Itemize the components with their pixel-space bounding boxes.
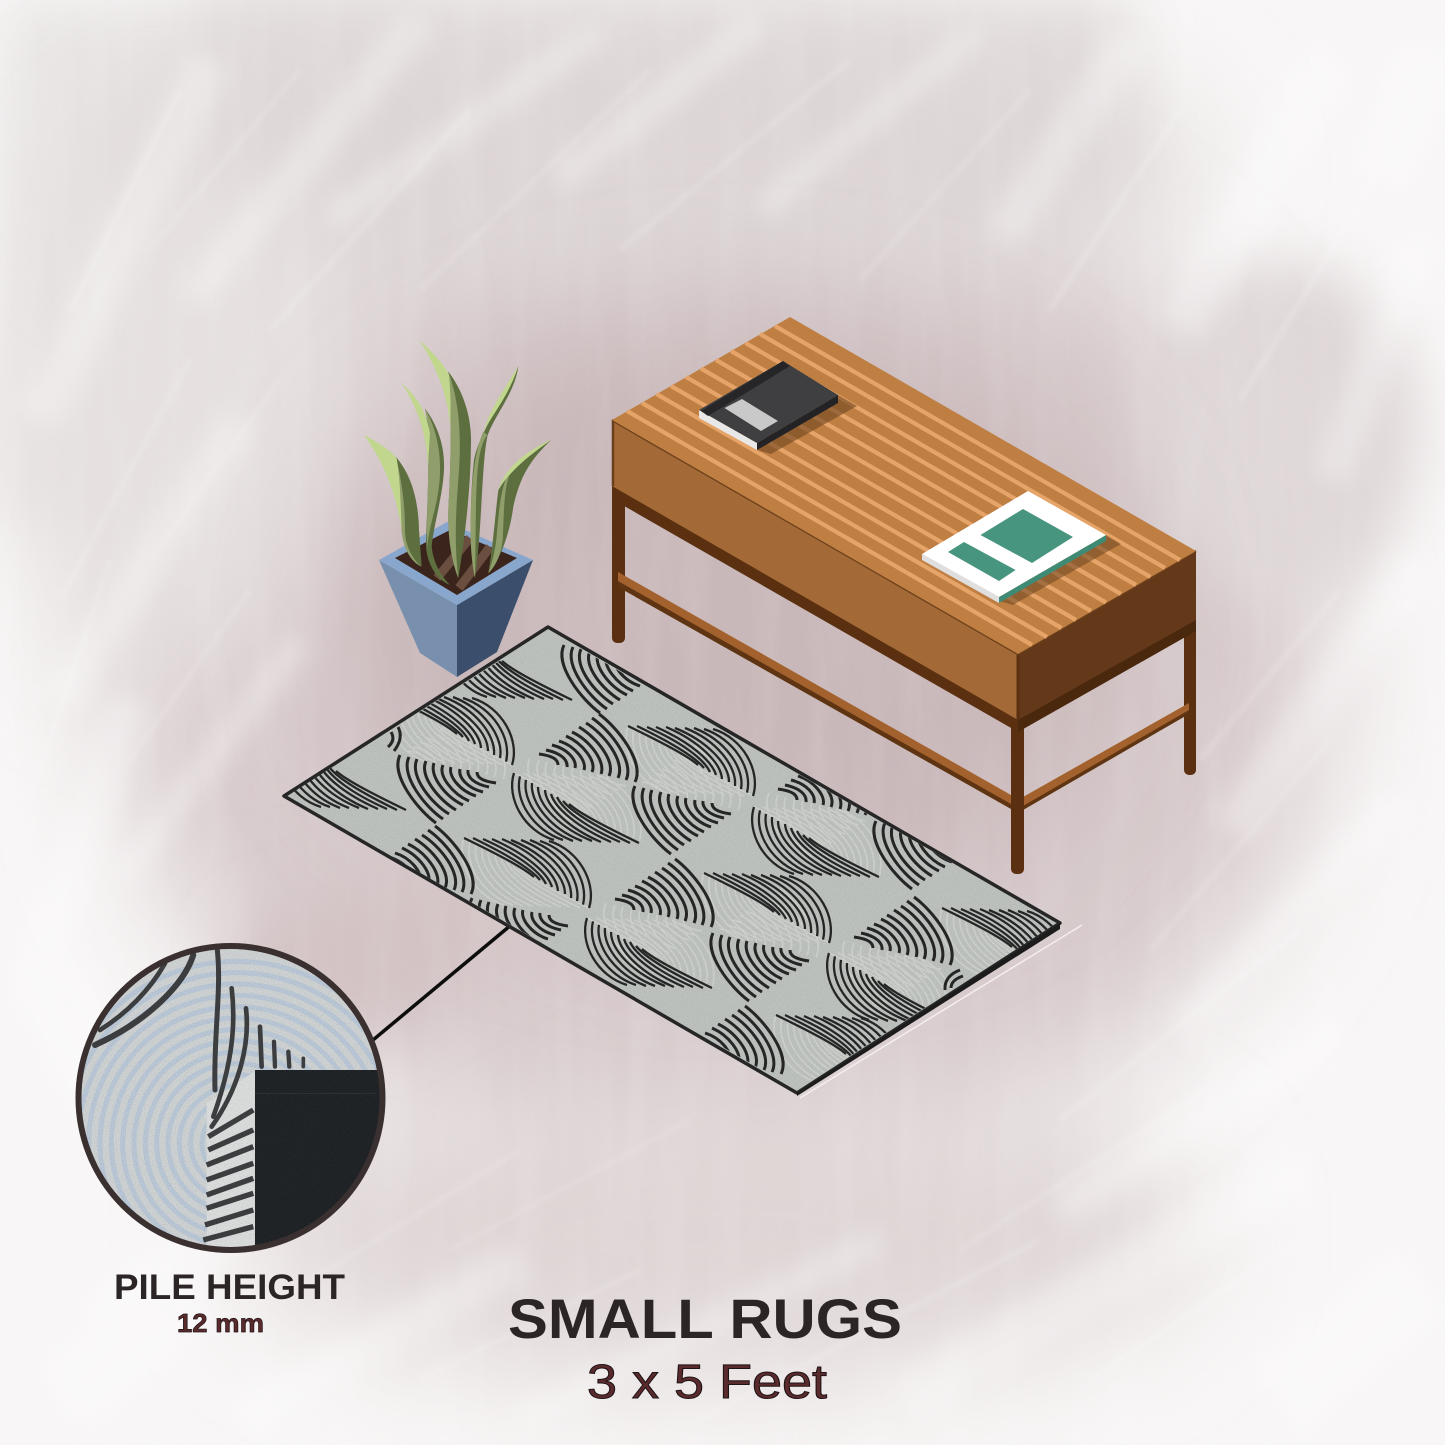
pot: [379, 522, 533, 677]
plant in blue pot: [364, 339, 552, 677]
title: small rugs: SMALL RUGS: [508, 1287, 902, 1350]
label: pile height: 12 mm: [177, 1308, 264, 1338]
table legs: [612, 485, 1196, 775]
dark arcs: [95, 950, 303, 1127]
title: small rugs: [508, 1287, 902, 1409]
label: pile height: [114, 1268, 345, 1338]
connector line to zoom circle: [373, 925, 511, 1040]
rug highlight line: [800, 925, 1082, 1098]
small edge arcs: [388, 727, 963, 990]
zoom circle: pile detail: [55, 940, 419, 1325]
black backing corner: [255, 1070, 390, 1263]
table under rail: [612, 420, 1196, 732]
table front face: [612, 420, 1018, 721]
notebook: [699, 361, 857, 454]
label: pile height: PILE HEIGHT: [114, 1268, 345, 1307]
magazine: [922, 491, 1121, 605]
rug base: [284, 627, 1060, 1093]
fan motifs type D: [396, 696, 1053, 1056]
coffee table: [612, 317, 1196, 874]
table lower stretchers: [618, 572, 1189, 810]
rug pile texture: [390, 711, 1015, 1081]
fan motifs type C: [375, 714, 952, 1074]
plant leaves: [364, 339, 552, 585]
table side face: [1018, 551, 1196, 721]
white pile wedge: [207, 1070, 257, 1263]
title: small rugs: 3 x 5 Feet: [587, 1356, 827, 1409]
patterned rug: [279, 620, 1070, 1118]
pile arcs: [55, 961, 419, 1325]
table top: [612, 317, 1196, 654]
fan motifs type A: [279, 630, 954, 1023]
fan motifs type B: [398, 645, 972, 1001]
